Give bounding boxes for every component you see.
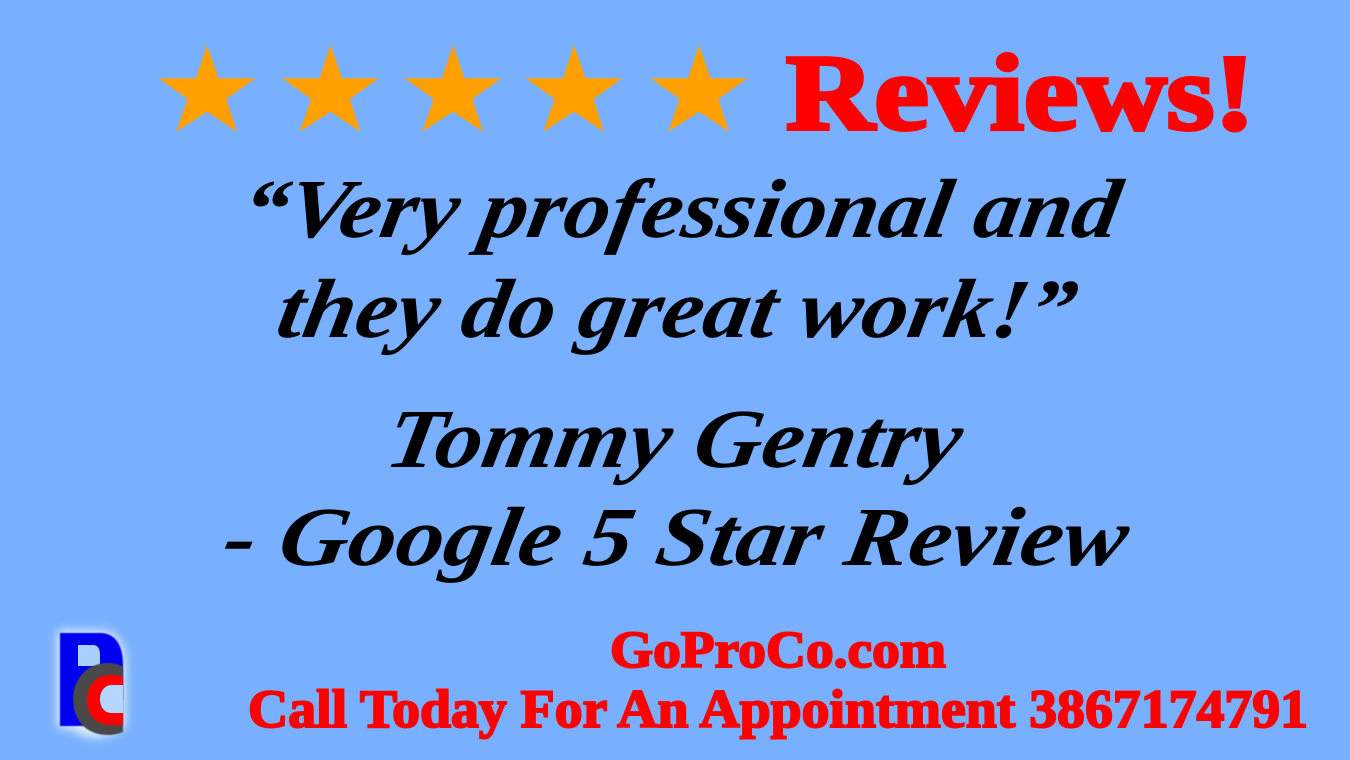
attribution bbox=[217, 394, 1137, 584]
review quote bbox=[235, 164, 1130, 356]
review source: - Google 5 Star Review bbox=[217, 492, 1137, 584]
letter P bbox=[60, 633, 123, 726]
five star rating bbox=[159, 45, 747, 132]
website: GoProCo.com bbox=[610, 622, 946, 679]
icon: star 4 bbox=[526, 45, 622, 132]
logo glow bbox=[60, 633, 123, 735]
reviewer name: Tommy Gentry bbox=[380, 394, 970, 486]
icon: star 2 bbox=[282, 45, 379, 132]
letter C outer bbox=[73, 663, 123, 735]
quote line 1: “Very professional and bbox=[235, 164, 1130, 256]
letter C inner bbox=[100, 685, 123, 713]
heading: Reviews! bbox=[786, 34, 1255, 153]
letter C red bbox=[87, 675, 123, 725]
letter P counter bbox=[78, 645, 100, 666]
call to action: Call Today For An Appointment 3867174791 bbox=[248, 679, 1308, 739]
icon: star 5 bbox=[651, 45, 747, 132]
quote line 2: they do great work!” bbox=[271, 264, 1084, 356]
contact details bbox=[248, 622, 1308, 739]
logo bbox=[60, 633, 123, 735]
icon: star 3 bbox=[405, 45, 501, 132]
icon: star 1 bbox=[159, 45, 255, 132]
